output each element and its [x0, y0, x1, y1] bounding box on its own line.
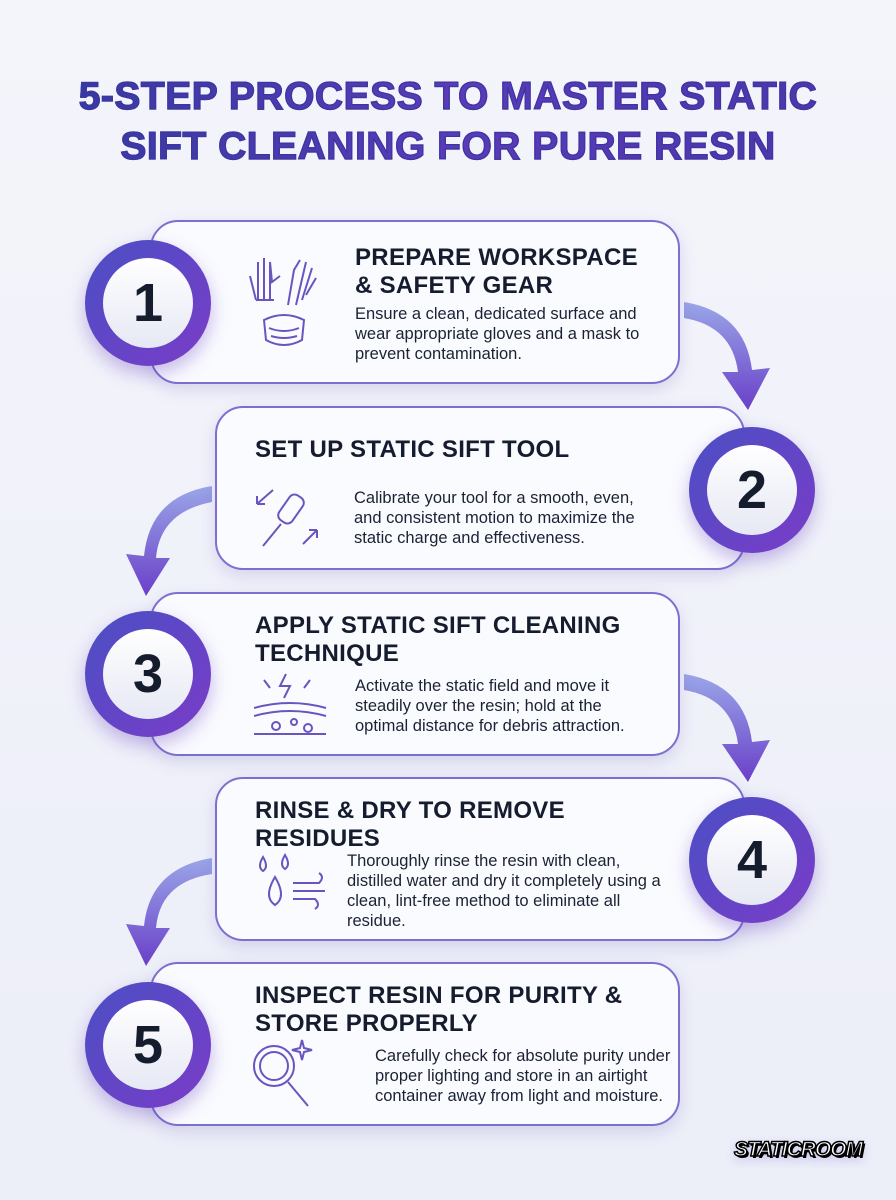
text block: Thoroughly rinse the resin with clean, distilled water and dry it completely using a clean, lint-free method to eliminate all residue.: [347, 852, 661, 930]
heading: [255, 982, 622, 1037]
icon: magnifier: [253, 1040, 312, 1107]
heading: [255, 612, 621, 667]
text block: Carefully check for absolute purity under proper lighting and store in an airtight container away from light and moisture.: [375, 1047, 670, 1105]
icon: gloves and mask: [249, 258, 317, 346]
heading: INSPECT RESIN FOR PURITY &: [255, 982, 622, 1009]
heading: PREPARE WORKSPACE: [355, 244, 638, 271]
logo: STATICROOM: [734, 1138, 862, 1161]
badge 2: [689, 427, 815, 553]
heading: STORE PROPERLY: [255, 1010, 478, 1037]
panel: step 3: [150, 592, 680, 756]
icon: static field: [254, 674, 326, 735]
heading: APPLY STATIC SIFT CLEANING: [255, 612, 621, 639]
panel: step 1: [150, 220, 680, 384]
text block: Calibrate your tool for a smooth, even, and consistent motion to maximize the static charge and effectiveness.: [354, 489, 635, 547]
badge 4: 4: [737, 830, 767, 890]
panel: step 4: [215, 777, 745, 941]
text block: Ensure a clean, dedicated surface and wear appropriate gloves and a mask to prevent contamination.: [355, 305, 639, 363]
heading: & SAFETY GEAR: [355, 272, 553, 299]
heading: [355, 244, 638, 299]
panel: step 5: [150, 962, 680, 1126]
title: SIFT CLEANING FOR PURE RESIN: [120, 125, 776, 168]
badge 5: 5: [133, 1015, 163, 1075]
badge 2: 2: [737, 460, 767, 520]
title: [0, 72, 896, 172]
icon: sift tool: [256, 489, 318, 547]
badge 3: 3: [133, 644, 163, 704]
heading: RINSE & DRY TO REMOVE: [255, 797, 565, 824]
panel: step 2: [215, 406, 745, 570]
badge 4: [689, 797, 815, 923]
heading: [255, 797, 565, 852]
title: 5-STEP PROCESS TO MASTER STATIC: [79, 75, 817, 118]
heading: SET UP STATIC SIFT TOOL: [255, 436, 569, 463]
heading: RESIDUES: [255, 825, 380, 852]
badge 5: [85, 982, 211, 1108]
badge 3: [85, 611, 211, 737]
heading: TECHNIQUE: [255, 640, 399, 667]
badge 1: [85, 240, 211, 366]
icon: water drops and wind: [259, 853, 325, 910]
badge 1: 1: [133, 273, 163, 333]
text block: Activate the static field and move it steadily over the resin; hold at the optimal distance for debris attraction.: [355, 677, 625, 735]
